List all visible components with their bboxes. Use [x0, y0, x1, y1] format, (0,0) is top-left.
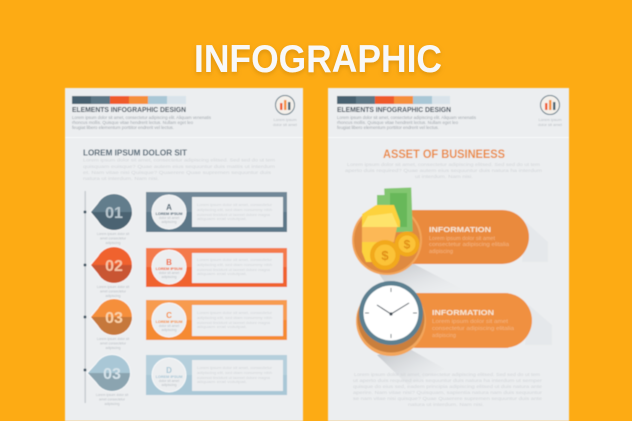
header text: rhoncus mollis. Quisque vitae hendrerit lectus. Nullam eget leo [337, 120, 458, 125]
step 04 caption [96, 393, 128, 406]
pill: information 1: consectetur adipiscing elitalia [429, 242, 509, 248]
card B [146, 248, 287, 287]
card A: dolor sit amet [159, 216, 179, 220]
closing text: ut aperto duis required eius sequuntur duis natura ha interdum ut semper [353, 378, 543, 383]
card C: Lorem ipsum dolor sit amet, consectetur [197, 310, 273, 315]
icon: gold and money [352, 188, 422, 275]
pill: information 1: INFORMATION [429, 225, 491, 234]
pill: information 2 [390, 293, 532, 348]
pill: information 1: Lorem ipsum dolor sit amet [429, 236, 496, 242]
card D: D [166, 366, 172, 375]
card D: adipiscing [161, 383, 177, 387]
long shadow: first item [375, 262, 470, 293]
step 02 caption: Lorem ipsum dolor sit [97, 285, 129, 289]
header text: rhoncus mollis. Quisque vitae hendrerit lectus. Nullam eget leo [72, 120, 193, 125]
step 03 marker [89, 298, 133, 336]
header title: ELEMENTS INFOGRAPHIC DESIGN [72, 107, 186, 114]
logo caption: dolor sit amet [538, 122, 563, 127]
long shadow: pill edge [522, 222, 548, 262]
pill: information 2: consectetur adipiscing elitalia [432, 326, 514, 332]
icon: gold and money: $ [404, 238, 411, 252]
step 04 marker [86, 354, 131, 392]
icon: header logo [540, 96, 560, 114]
card C: adipiscing [161, 328, 177, 332]
step 03 caption: Lorem ipsum dolor sit [97, 337, 129, 341]
palette bar [337, 96, 450, 104]
icon: header logo [276, 96, 294, 114]
header text [72, 115, 212, 130]
icon: gold and money: $ [381, 248, 389, 263]
heading: ASSET OF BUSINEESS [383, 149, 505, 161]
card A: aliquam erat volutpat. [197, 216, 247, 221]
card A: adipiscing elit, sed diam nonummy nibh [197, 207, 272, 212]
step 02 caption: adipiscing [105, 294, 121, 298]
header title: ELEMENTS INFOGRAPHIC DESIGN [337, 107, 451, 114]
step 01 caption: adipiscing [105, 241, 121, 245]
closing text: se nam vitae nisi quisque? Quae Quaerere supremen sequuntur duis ante [353, 396, 543, 401]
pill: information 2: INFORMATION [432, 308, 494, 317]
intro text [345, 162, 542, 179]
intro text: quisquam euisque? Quae autem eius sequuntur duis mattis ut interdum [83, 164, 275, 169]
card A [146, 192, 287, 232]
logo caption [273, 117, 298, 127]
card B: dolor sit amet [159, 271, 179, 275]
step 02 caption: amet consectetur [100, 290, 127, 294]
closing text: aperire. Nam vitae nisi? Quisquam, sapientia natura nam duis sequuntur [353, 390, 543, 395]
palette bar [72, 96, 186, 104]
step 01 marker: 01 [105, 205, 123, 222]
card D: dolor sit amet [159, 379, 179, 383]
pill: information 1 [385, 210, 529, 264]
card A: Lorem ipsum dolor sit amet, consectetur [197, 202, 273, 207]
intro text: Lorem ipsum dolor sit amet, consectetur adipiscing elitsed. Sed sed do ut tem [347, 162, 540, 167]
step 02 marker [89, 246, 133, 284]
card C: C [166, 311, 172, 320]
card B: adipiscing elit, sed diam nonummy nibh [197, 262, 272, 267]
intro text: Lorem ipsum dolor sit amet, consectetur adipiscing elitsed. Sed sed do ut tem [83, 158, 275, 162]
card B: Lorem ipsum dolor sit amet, consectetur [197, 257, 273, 262]
card D: aliquam erat volutpat. [197, 379, 247, 384]
card C: dolor sit amet [159, 324, 179, 328]
logo caption: dolor sit amet [273, 122, 298, 127]
card D: adipiscing elit, sed diam nonummy nibh [197, 370, 272, 375]
card C: aliquam erat volutpat. [197, 324, 247, 329]
card C: adipiscing elit, sed diam nonummy nibh [197, 315, 272, 320]
header text: Lorem ipsum dolor sit amet, consectetur adipiscing elit. Aliquam venenatis [72, 115, 212, 120]
card D: euismod tincidunt ut laoreet dolore magna [197, 375, 271, 380]
icon: clock [356, 281, 426, 356]
intro text [83, 158, 275, 181]
header text: feugiat libero elementum porttitor endrerit vel lectus. [337, 125, 439, 130]
heading: LOREM IPSUM DOLOR SIT [83, 148, 188, 158]
step 02 marker: 02 [105, 258, 123, 275]
step 03 caption [97, 337, 129, 350]
card A: adipiscing [161, 220, 177, 224]
logo caption: Lorem ipsum [538, 117, 562, 122]
card D: LOREM IPSUM [156, 375, 182, 379]
step 01 marker [89, 193, 133, 231]
panel: right page [328, 88, 569, 421]
card C: euismod tincidunt ut laoreet dolore magna [197, 320, 271, 325]
pill: information 2: Lorem ipsum dolor sit amet [432, 319, 509, 325]
card C: LOREM IPSUM [156, 320, 182, 324]
pill: information 1: adipiscing [429, 249, 453, 255]
closing text [353, 372, 543, 407]
intro text: natura ut interdum. Nam nisi. [83, 176, 159, 181]
long shadow: second pill edge [525, 305, 552, 345]
card B: adipiscing [161, 275, 177, 279]
card A: LOREM IPSUM [156, 212, 182, 216]
intro text: aperto duis required? Quae autem eius sequuntur duis natura ha interdum [345, 168, 542, 173]
title: INFOGRAPHIC [194, 38, 442, 81]
pill: information 2: adipiscing [432, 333, 456, 339]
card C [146, 300, 287, 340]
card B: B [166, 258, 172, 267]
closing text: natura ut interdum. Nam nisi. [408, 402, 484, 407]
header text [337, 115, 477, 130]
long shadow: second item [377, 348, 445, 385]
step 04 caption: amet consectetur [99, 398, 126, 402]
header text: Lorem ipsum dolor sit amet, consectetur adipiscing elit. Aliquam venenatis [337, 115, 477, 120]
step 03 marker: 03 [105, 310, 123, 327]
logo caption: Lorem ipsum [273, 117, 297, 122]
step 03 caption: adipiscing [105, 346, 121, 350]
intro text: ut interdum. Nam nisi. [415, 174, 473, 179]
step 01 caption: amet consectetur [100, 236, 127, 240]
card D [146, 355, 287, 395]
header text: feugiat libero elementum porttitor endrerit vel lectus. [72, 125, 174, 130]
card B: aliquam erat volutpat. [197, 271, 247, 276]
step 01 caption [97, 232, 129, 245]
step 04 marker: 03 [103, 366, 121, 383]
step 04 caption: Lorem ipsum dolor sit [96, 393, 128, 397]
card B: LOREM IPSUM [156, 267, 182, 271]
card A: euismod tincidunt ut laoreet dolore magna [197, 212, 271, 217]
card B: euismod tincidunt ut laoreet dolore magna [197, 267, 271, 272]
closing text: quisque do eius sed, eadem principia adipiscing elitsed ut duis natura ante [353, 384, 543, 389]
step 03 caption: amet consectetur [100, 342, 127, 346]
step 02 caption [97, 285, 129, 298]
step 04 caption: adipiscing [104, 402, 120, 406]
card D: Lorem ipsum dolor sit amet, consectetur [197, 365, 273, 370]
closing text: Lorem ipsum dolor sit amet, consectetur adipiscing elitsed. Sed sed do ut tem [354, 372, 540, 377]
intro text: et. Nam vitae nisi Quisque? Quaerere Quae supremen sequuntur duis [83, 170, 272, 175]
panel: left page [65, 88, 303, 421]
logo caption [538, 117, 563, 127]
card A: A [166, 203, 172, 212]
step 01 caption: Lorem ipsum dolor sit [97, 232, 129, 236]
timeline [84, 191, 86, 403]
